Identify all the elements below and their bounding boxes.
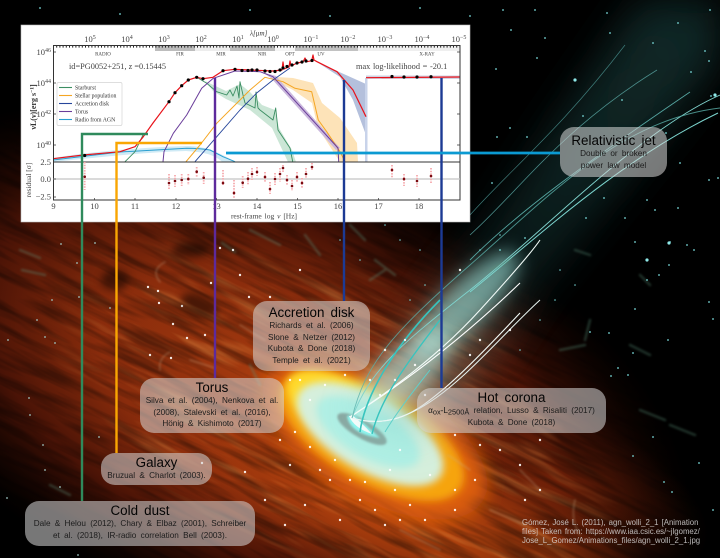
label: relativistic jet xyxy=(560,127,667,177)
label: relativistic jet: Double or broken xyxy=(580,149,647,158)
gas wisps xyxy=(20,225,695,550)
image credit: files] Taken from: https://www.iaa.csic.es/~jlgomez/ xyxy=(522,526,700,536)
label: galaxy: Bruzual & Charlot (2003). xyxy=(107,471,206,480)
y axis labels: 2.5 xyxy=(40,157,51,167)
connector: torus xyxy=(214,78,216,378)
top axis: wavelength: 10 xyxy=(415,34,423,44)
y axis labels: 10 xyxy=(36,78,45,88)
top axis: wavelength: 10 xyxy=(452,34,460,44)
wavelength axis bands: OPT xyxy=(285,52,295,58)
top axis: wavelength: 10 xyxy=(121,34,130,44)
legend: Stellar population xyxy=(75,94,116,100)
label: hot corona: Kubota & Done (2018) xyxy=(468,418,555,426)
label: hot corona: αox-L2500Å relation, Lusso & Risaliti (2017) xyxy=(428,406,595,416)
x axis labels: 11 xyxy=(131,201,139,211)
wavelength axis bands: FIR xyxy=(176,52,185,58)
x axis labels: 12 xyxy=(172,201,180,211)
label: relativistic jet: power law model xyxy=(581,160,646,170)
x axis labels: 16 xyxy=(334,201,342,211)
top axis: wavelength: 4 xyxy=(130,35,133,41)
label: accretion disk: Accretion disk xyxy=(269,305,354,320)
component bands xyxy=(53,62,460,162)
x axis labels: 18 xyxy=(415,201,423,211)
y axis labels: residual [σ] xyxy=(24,163,33,197)
top axis: wavelength: 10 xyxy=(158,34,167,44)
y axis labels: ] xyxy=(29,84,38,87)
top axis: wavelength: 5 xyxy=(93,35,96,41)
label: hot corona xyxy=(417,388,606,433)
stellar curve xyxy=(186,77,345,162)
label: accretion disk: Kubota & Done (2018) xyxy=(268,344,355,353)
total model curve xyxy=(53,55,366,159)
top axis: wavelength: 10 xyxy=(378,34,386,44)
accretion curve xyxy=(195,68,290,162)
accretion disk xyxy=(237,324,513,552)
label: torus: Torus xyxy=(196,380,228,395)
y axis labels: 10 xyxy=(36,140,45,150)
legend: Starburst xyxy=(75,86,96,92)
label: accretion disk: Slone & Netzer (2012) xyxy=(268,332,355,342)
y axis labels: 0.0 xyxy=(40,174,51,184)
label: accretion disk: Richards et al. (2006) xyxy=(269,321,354,330)
wavelength axis bands: RADIO xyxy=(95,52,111,58)
label: torus: Silva et al. (2004), Nenkova et al. xyxy=(146,396,278,405)
residual points xyxy=(85,162,431,198)
label: cold dust: Dale & Helou (2012), Chary & Elbaz (2001), Schreiber xyxy=(34,519,246,528)
legend: Torus xyxy=(75,110,89,116)
y axis labels: νL(ν)[erg s xyxy=(29,93,38,130)
white plot panel xyxy=(21,25,470,222)
top axis: wavelength: 10 xyxy=(195,34,204,44)
top axis: wavelength: 3 xyxy=(167,35,170,41)
component curves xyxy=(53,55,460,162)
top axis: wavelength: 10 xyxy=(232,34,241,44)
image credit: Gómez, José L. (2011), agn_wolli_2_1 [Animation xyxy=(522,518,698,526)
connector: galaxy xyxy=(116,143,202,453)
legend xyxy=(57,82,122,126)
y axis labels: 10 xyxy=(36,47,45,57)
top axis: wavelength: 0 xyxy=(276,35,279,41)
top axis: wavelength: −1 xyxy=(312,35,318,41)
y axis labels: 40 xyxy=(45,141,51,147)
connector: cold dust xyxy=(82,134,148,501)
y axis labels: 46 xyxy=(45,48,51,54)
top axis: wavelength: −3 xyxy=(386,35,392,41)
y axis labels xyxy=(24,47,51,202)
x axis labels: 9 xyxy=(51,201,56,211)
label: accretion disk xyxy=(253,301,370,371)
y axis labels: −1 xyxy=(30,87,36,93)
wavelength axis bands: UV xyxy=(317,52,325,58)
y axis labels: 44 xyxy=(45,79,51,85)
wavelength axis bands xyxy=(95,46,460,58)
label: torus: Hönig & Kishimoto (2017) xyxy=(162,419,262,428)
top axis: wavelength: −4 xyxy=(423,35,429,41)
x axis labels: 15 xyxy=(293,201,302,211)
top axis: wavelength: 10 xyxy=(267,34,276,44)
image credit xyxy=(522,518,700,545)
label: torus: (2008), Stalevski et al. (2016), xyxy=(153,408,271,416)
label: torus xyxy=(140,378,284,433)
photometric data points xyxy=(85,60,431,156)
plot frame and ticks xyxy=(53,46,460,200)
x axis labels: 10 xyxy=(90,201,99,211)
top axis: wavelength: λ[μm] xyxy=(249,30,268,38)
x axis labels: 14 xyxy=(253,201,262,211)
wavelength axis bands: NIR xyxy=(258,52,267,58)
x axis labels: 17 xyxy=(374,201,383,211)
y axis labels: −2.5 xyxy=(36,192,51,202)
torus curve xyxy=(163,71,339,162)
connector: relativistic jet xyxy=(226,152,560,154)
image credit: Jose_L_Gomez/Animations_files/agn_wolli_2_1.jpg xyxy=(522,536,700,544)
top axis: wavelength: 10 xyxy=(304,34,312,44)
dark cloud patches xyxy=(101,243,222,322)
source id: id=PG0052+251, z =0.15445 xyxy=(69,62,166,71)
legend: Radio from AGN xyxy=(75,116,116,124)
y axis labels: 10 xyxy=(36,109,45,119)
label: hot corona: Hot corona xyxy=(478,390,545,405)
label: relativistic jet: Relativistic jet xyxy=(571,133,656,148)
label: cold dust: et al. (2018), IR-radio correlation Bell (2003). xyxy=(53,530,227,540)
top axis: wavelength: 1 xyxy=(241,35,244,41)
wavelength axis bands: X-RAY xyxy=(419,52,435,58)
y axis labels: 42 xyxy=(45,110,51,116)
label: accretion disk: Temple et al. (2021) xyxy=(272,356,351,364)
label: cold dust: Cold dust xyxy=(110,503,169,518)
top axis: wavelength: 10 xyxy=(84,34,93,44)
top axis: wavelength: 10 xyxy=(341,34,349,44)
starburst curve xyxy=(125,77,293,162)
top axis: wavelength xyxy=(53,30,466,46)
legend: Accretion disk xyxy=(75,102,109,108)
connector: accretion disk xyxy=(343,80,345,301)
label: cold dust xyxy=(25,501,255,546)
label: galaxy xyxy=(101,453,212,485)
x axis labels xyxy=(51,201,423,220)
bright streak texture xyxy=(73,250,610,558)
relativistic jet glow xyxy=(348,0,720,440)
top axis: wavelength: −5 xyxy=(460,35,466,41)
wavelength axis bands: MIR xyxy=(216,52,226,58)
x axis labels: rest-frame log ν [Hz] xyxy=(231,212,297,220)
x axis labels: 13 xyxy=(212,201,221,211)
top axis: wavelength: −2 xyxy=(349,35,355,41)
likelihood note: max log-likelihood = -20.1 xyxy=(356,62,447,71)
radio curve xyxy=(53,148,235,162)
label: galaxy: Galaxy xyxy=(136,455,177,470)
connector: hot corona xyxy=(440,78,443,388)
top axis: wavelength: 2 xyxy=(204,35,207,41)
